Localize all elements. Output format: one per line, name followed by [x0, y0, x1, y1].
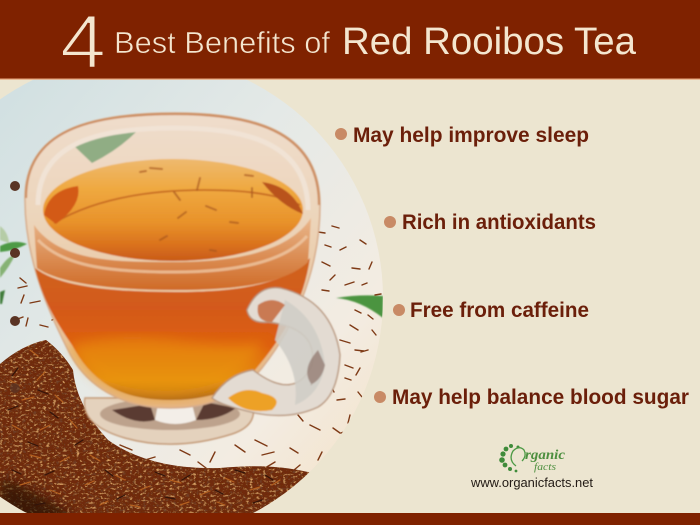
footer band [0, 513, 700, 525]
dark bullet dots on photo [10, 181, 20, 393]
frosted band under surface [34, 218, 311, 290]
benefit: blood sugar: May help balance blood sugar [392, 386, 689, 409]
cup outer glass [25, 113, 320, 408]
pile dark base [0, 478, 70, 525]
pile strands [10, 350, 280, 507]
title light part: Best Benefits of [114, 25, 330, 60]
big number 4: 4 [60, 0, 106, 85]
header band [0, 0, 700, 85]
tea surface [43, 159, 303, 261]
foot [84, 398, 253, 444]
glass cup [25, 113, 340, 444]
logo: Organic Facts: rganic [525, 448, 566, 463]
handle [212, 288, 340, 415]
tea flecks [140, 168, 253, 251]
benefit: antioxidants: Rich in antioxidants [402, 211, 596, 234]
icon: leaf swirl [499, 444, 525, 472]
logo: Organic Facts: facts [534, 461, 556, 473]
website url: www.organicfacts.net [470, 475, 593, 490]
benefit: caffeine: Free from caffeine [410, 299, 589, 322]
benefit: sleep: May help improve sleep [353, 124, 589, 147]
inner rim [38, 128, 308, 210]
tea body [35, 258, 310, 400]
circular tea photo [0, 80, 383, 513]
leaves at left edge [0, 226, 27, 304]
leaf at right [336, 295, 383, 318]
rooibos pile [0, 340, 310, 513]
title strong part: Red Rooibos Tea [342, 21, 637, 63]
scattered rooibos flecks [15, 226, 381, 470]
green reflection in glass [72, 131, 136, 163]
logo: Organic Facts [470, 444, 593, 490]
